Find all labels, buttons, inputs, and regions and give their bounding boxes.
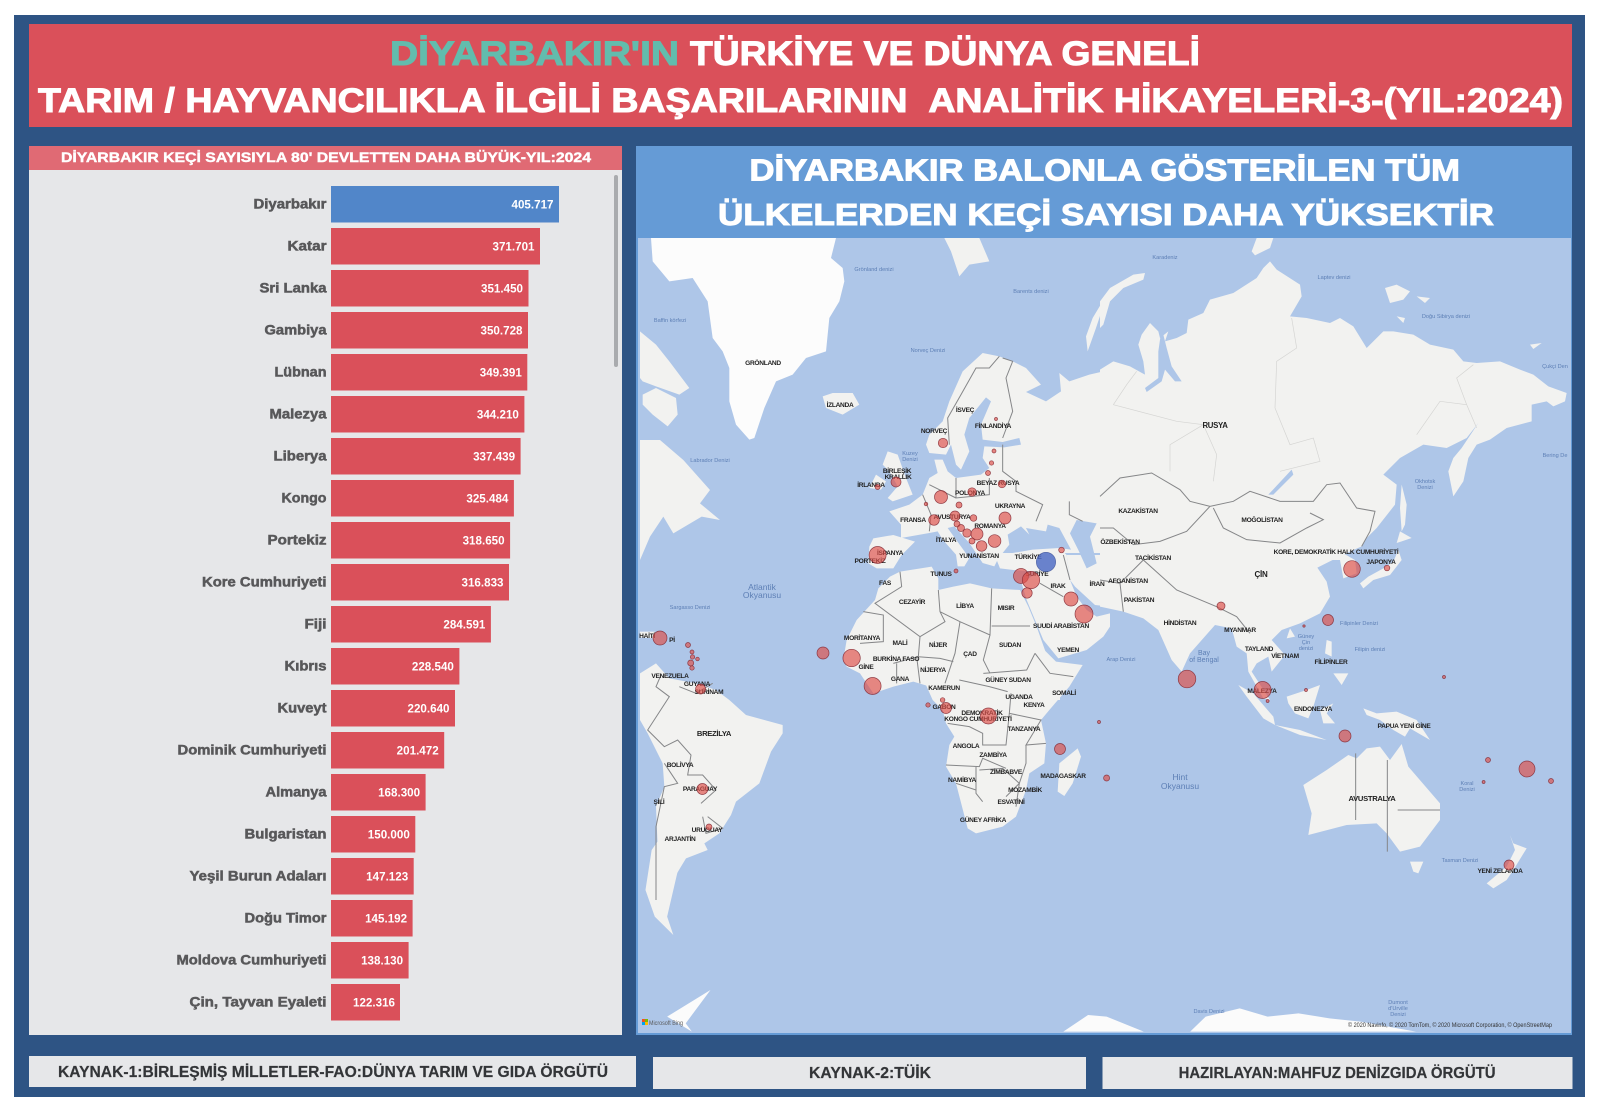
land: South America, southern Africa xyxy=(640,640,1083,900)
map sea labels: Bering De xyxy=(1543,453,1567,459)
map sea labels: Filipinler Denizi xyxy=(1340,621,1378,627)
bar: Moldova Cumhuriyeti xyxy=(176,942,409,978)
land: Siberia xyxy=(1100,238,1567,568)
map sea labels: Denizi xyxy=(1417,485,1433,491)
map country labels: AFGANİSTAN xyxy=(1108,577,1148,585)
map country labels: URUGUAY xyxy=(692,827,723,834)
map sea labels: Bay xyxy=(1198,650,1211,657)
map sea labels: Okhotsk xyxy=(1415,479,1435,485)
land: Atlantic Canada, Iberia, North Africa, Middle East xyxy=(640,440,1110,700)
map bubble: Diyarbakır xyxy=(1036,552,1056,572)
bar: Katar: 371.701 xyxy=(492,242,535,254)
land: Patagonia and Antarctica xyxy=(645,837,1416,1032)
bar: Almanya: 168.300 xyxy=(378,788,420,800)
map sea labels: Filipin denizi xyxy=(1355,647,1385,653)
bar: Kore Cumhuriyeti: Kore Cumhuriyeti xyxy=(202,574,326,590)
map country labels: MALEZYA xyxy=(1247,688,1277,695)
map country labels: GÜNEY AFRİKA xyxy=(960,815,1007,824)
bar: Çin, Tayvan Eyaleti xyxy=(190,984,400,1020)
author box xyxy=(1102,1057,1572,1089)
bar: Kıbrıs: 228.540 xyxy=(412,662,454,674)
map country labels: AVUSTURYA xyxy=(934,514,971,521)
bar: Sri Lanka: Sri Lanka xyxy=(260,280,327,296)
map sea labels: Arap Denizi xyxy=(1107,657,1135,663)
map country labels: FRANSA xyxy=(900,517,926,524)
bar: Kongo: Kongo xyxy=(282,490,326,506)
map country labels: UKRAYNA xyxy=(995,503,1026,510)
map country labels: KRALLIK xyxy=(885,474,912,481)
map country labels: KORE, DEMOKRATİK HALK CUMHURİYETİ xyxy=(1274,548,1399,556)
map country labels: DEMOKRATİK xyxy=(961,709,1003,717)
bar: Yeşil Burun Adaları xyxy=(190,858,414,894)
map sea labels: Davis Denizi xyxy=(1193,1009,1225,1015)
map country labels: NAMİBYA xyxy=(948,776,977,784)
bar: Kore Cumhuriyeti xyxy=(202,564,509,600)
bar: Fiji xyxy=(304,606,491,642)
map country labels: ÖZBEKİSTAN xyxy=(1100,537,1140,546)
map sea labels: Denizi xyxy=(1459,787,1475,793)
map country labels: CEZAYİR xyxy=(899,598,926,606)
bar: Kıbrıs: Kıbrıs xyxy=(284,658,326,674)
bar: Almanya xyxy=(266,774,426,810)
map country labels: TAYLAND xyxy=(1245,646,1274,653)
map land masses xyxy=(640,238,1567,1032)
bar: Doğu Timor: Doğu Timor xyxy=(244,910,327,926)
bar: Almanya: Almanya xyxy=(266,784,327,800)
title banner xyxy=(29,24,1572,127)
map heading xyxy=(718,152,1494,232)
map country labels: YEMEN xyxy=(1057,647,1080,654)
map country labels: PAPUA YENİ GİNE xyxy=(1378,722,1431,730)
map logo xyxy=(642,1019,683,1027)
map country labels: İSVEÇ xyxy=(956,406,975,414)
scrollbar xyxy=(614,175,618,367)
map sea labels: Laptev denizi xyxy=(1318,275,1350,281)
title banner: DİYARBAKIR'IN xyxy=(390,35,679,73)
bar: Lübnan xyxy=(274,354,527,390)
map country labels: GRÖNLAND xyxy=(745,358,781,367)
map sea labels: Denizi xyxy=(1390,1012,1406,1018)
map country labels: RUSYA xyxy=(1202,421,1228,430)
bar: Portekiz xyxy=(268,522,510,558)
bar: Moldova Cumhuriyeti: Moldova Cumhuriyeti xyxy=(176,952,326,968)
map country labels: SURİYE xyxy=(1026,570,1049,578)
map country labels: ESVATİNİ xyxy=(997,798,1025,806)
bar chart heading xyxy=(29,146,622,170)
map sea labels: Doğu Sibirya denizi xyxy=(1422,314,1470,320)
map ocean xyxy=(638,238,1571,1033)
map sea labels: Dumont xyxy=(1388,1000,1408,1006)
bar: Dominik Cumhuriyeti: Dominik Cumhuriyeti xyxy=(178,742,326,758)
bar: Lübnan: Lübnan xyxy=(274,364,326,380)
map country labels: KENYA xyxy=(1024,702,1045,709)
bar: Dominik Cumhuriyeti xyxy=(178,732,444,768)
bar: Yeşil Burun Adaları: 147.123 xyxy=(366,872,408,884)
map country labels: GABON xyxy=(932,704,956,711)
bar: Diyarbakır xyxy=(254,186,559,222)
map country labels: ROMANYA xyxy=(974,523,1006,530)
bar: Moldova Cumhuriyeti: 138.130 xyxy=(361,956,403,968)
bar: Kuveyt: 220.640 xyxy=(408,704,450,716)
map sea labels: Baffin körfezi xyxy=(654,318,686,324)
bar: Lübnan: 349.391 xyxy=(480,368,522,380)
bar: Katar: Katar xyxy=(288,238,327,254)
map bubbles: countries xyxy=(653,418,1554,870)
map country labels: KAZAKİSTAN xyxy=(1118,507,1158,515)
map country labels: PARAGUAY xyxy=(683,786,718,793)
map sea labels: Güney xyxy=(1298,634,1314,640)
map country labels: BOLİVYA xyxy=(667,761,694,769)
inland seas xyxy=(1003,328,1293,568)
source box 1 xyxy=(29,1056,636,1087)
map country labels: MALİ xyxy=(893,639,908,647)
map sea labels: Labrador Denizi xyxy=(690,458,730,464)
map country labels: İRAN xyxy=(1090,580,1105,588)
map country labels: ZİMBABVE xyxy=(990,768,1023,776)
map sea labels: Çin xyxy=(1302,640,1310,646)
map country labels: MOĞOLİSTAN xyxy=(1241,515,1283,524)
map heading: ÜLKELERDEN KEÇİ SAYISI DAHA YÜKSEKTİR xyxy=(718,197,1494,232)
map country labels: PAKİSTAN xyxy=(1124,596,1155,604)
map country labels: HİNDİSTAN xyxy=(1164,619,1197,627)
bar: Gambiya xyxy=(264,312,528,348)
source box 2 xyxy=(653,1057,1086,1089)
map country labels: POLONYA xyxy=(955,490,985,497)
map sea labels: Karadeniz xyxy=(1152,255,1178,261)
map country labels: ŞİLİ xyxy=(654,798,665,806)
map country labels: BREZİLYA xyxy=(697,729,732,738)
source box 2: KAYNAK-2:TÜİK xyxy=(809,1065,932,1082)
bar: Doğu Timor: 145.192 xyxy=(365,914,407,926)
bar: Portekiz: 318.650 xyxy=(463,536,505,548)
bar: Liberya xyxy=(274,438,521,474)
map country labels: FİLİPİNLER xyxy=(1315,658,1348,666)
map country labels: KAMERUN xyxy=(928,685,960,692)
map country labels: ZAMBİYA xyxy=(979,751,1007,759)
bar: Yeşil Burun Adaları: Yeşil Burun Adaları xyxy=(190,868,326,884)
map country labels: PORTEKİZ xyxy=(855,557,886,565)
map country labels: ARJANTİN xyxy=(665,835,696,843)
bar: Kuveyt xyxy=(278,690,455,726)
map country labels: IRAK xyxy=(1051,583,1066,590)
author box: HAZIRLAYAN:MAHFUZ DENİZGIDA ÖRGÜTÜ xyxy=(1179,1065,1496,1082)
map sea labels: of Bengal xyxy=(1189,657,1219,664)
map country labels: BEYAZ RUSYA xyxy=(977,480,1020,487)
map sea labels: Barents denizi xyxy=(1013,289,1049,295)
bar: Gambiya: Gambiya xyxy=(264,322,327,338)
bar: Dominik Cumhuriyeti: 201.472 xyxy=(397,746,439,758)
map country labels: FAS xyxy=(879,580,892,587)
map country labels: BURKİNA FASO xyxy=(873,655,919,663)
map sea labels xyxy=(654,255,1568,1018)
map country labels: TANZANYA xyxy=(1008,726,1041,733)
map logo: Microsoft Bing xyxy=(649,1020,683,1027)
title banner: TARIM / HAYVANCILIKLA İLGİLİ BAŞARILARININ ANALİTİK HİKAYELERİ-3-(YIL:2024) xyxy=(38,82,1563,120)
map country labels: MADAGASKAR xyxy=(1040,773,1086,780)
map country labels: AVUSTRALYA xyxy=(1349,794,1396,803)
map country labels: MISIR xyxy=(998,605,1015,612)
title banner: TÜRKİYE VE DÜNYA GENELİ xyxy=(690,34,1200,73)
bar: Bulgaristan xyxy=(244,816,415,852)
bar: Diyarbakır: 405.717 xyxy=(512,200,554,212)
map country labels: MORİTANYA xyxy=(844,634,881,642)
bar: Çin, Tayvan Eyaleti: Çin, Tayvan Eyaleti xyxy=(190,994,326,1010)
bar: Liberya: 337.439 xyxy=(473,452,515,464)
map country labels: UGANDA xyxy=(1005,694,1033,701)
map country labels: TUNUS xyxy=(930,571,953,578)
map heading: DİYARBAKIR BALONLA GÖSTERİLEN TÜM xyxy=(750,152,1460,188)
bar: Katar xyxy=(288,228,540,264)
map sea labels: Sargasso Denizi xyxy=(670,605,710,611)
map country labels: HAİTİ xyxy=(639,632,655,640)
map country labels: NORVEÇ xyxy=(921,428,948,435)
map country labels: MOZAMBİK xyxy=(1008,786,1042,794)
land: Greenland, Canada, northern Europe xyxy=(640,238,1111,566)
map country labels: İRLANDA xyxy=(857,481,885,489)
map sea labels: Denizi xyxy=(902,457,918,463)
map country labels: BİRLEŞİK xyxy=(883,467,912,475)
bar: Bulgaristan: Bulgaristan xyxy=(244,826,326,842)
map country labels: VENEZUELA xyxy=(651,673,689,680)
map country labels: İTALYA xyxy=(936,536,957,544)
map country labels: SOMALİ xyxy=(1052,689,1076,697)
bar: Kongo xyxy=(282,480,514,516)
bar: Malezya: Malezya xyxy=(270,406,327,422)
map country labels: SUUDİ ARABİSTAN xyxy=(1033,622,1090,630)
bar: Diyarbakır: Diyarbakır xyxy=(254,196,327,212)
map country labels: ANGOLA xyxy=(953,743,980,750)
map country labels: NİJERYA xyxy=(920,666,946,674)
map sea labels: Hint xyxy=(1172,772,1188,782)
map country labels: VİETNAM xyxy=(1271,652,1300,660)
map sea labels: Okyanusu xyxy=(1161,781,1199,791)
panel: bar chart of goat counts xyxy=(29,146,622,1035)
map sea labels: Kuzey xyxy=(902,451,918,457)
bar: Kore Cumhuriyeti: 316.833 xyxy=(462,578,504,590)
map sea labels: d'Urville xyxy=(1388,1006,1408,1012)
map country labels: GUYANA xyxy=(684,681,711,688)
map country labels: İSPANYA xyxy=(877,549,904,557)
map country labels: GÜNEY SUDAN xyxy=(985,675,1031,684)
source box 1: KAYNAK-1:BİRLEŞMİŞ MİLLETLER-FAO:DÜNYA TARIM VE GIDA ÖRGÜTÜ xyxy=(58,1064,608,1081)
map sea labels: Grönland denizi xyxy=(854,267,894,273)
map country labels: GİNE xyxy=(859,663,874,671)
bar: Malezya: 344.210 xyxy=(477,410,519,422)
map sea labels: Atlantik xyxy=(748,582,777,592)
map country labels: YUNANİSTAN xyxy=(959,552,999,560)
map sea labels: Norveç Denizi xyxy=(911,348,945,354)
map country labels: GANA xyxy=(891,676,910,683)
bar: Kongo: 325.484 xyxy=(466,494,509,506)
map country labels: FİNLANDİYA xyxy=(975,422,1012,430)
bar: Doğu Timor xyxy=(244,900,413,936)
bar: Malezya xyxy=(270,396,524,432)
bar: Bulgaristan: 150.000 xyxy=(368,830,410,842)
bar chart heading: DİYARBAKIR KEÇİ SAYISIYLA 80' DEVLETTEN DAHA BÜYÜK-YIL:2024 xyxy=(61,149,591,165)
map attribution: © 2020 Navinfo, © 2020 TomTom, © 2020 Microsoft Corporation, © OpenStreetMap xyxy=(1348,1022,1553,1029)
country borders xyxy=(648,356,1440,900)
faint regional borders xyxy=(1113,318,1477,481)
bar: Portekiz: Portekiz xyxy=(268,532,327,548)
land: South Asia, Southeast Asia, Oceania xyxy=(1100,540,1527,888)
panel: world map xyxy=(636,146,1572,1035)
bar: Fiji: Fiji xyxy=(304,616,326,632)
bar: Kuveyt: Kuveyt xyxy=(278,700,327,716)
map country labels: JAPONYA xyxy=(1366,559,1396,566)
map country labels: LİBYA xyxy=(956,602,974,610)
map country labels: ÇAD xyxy=(963,651,977,658)
map country labels: TÜRKİYE xyxy=(1015,552,1042,561)
map country labels xyxy=(639,358,1523,875)
map country labels: Pİ xyxy=(669,636,675,644)
bar: Fiji: 284.591 xyxy=(443,620,486,632)
map country labels: ENDONEZYA xyxy=(1294,706,1333,713)
map sea labels: Koral xyxy=(1460,781,1474,787)
map country labels: ÇİN xyxy=(1255,570,1268,579)
bar: Çin, Tayvan Eyaleti: 122.316 xyxy=(353,998,395,1010)
map sea labels: Okyanusu xyxy=(743,590,781,600)
map country labels: SUDAN xyxy=(999,642,1022,649)
bar: Liberya: Liberya xyxy=(274,448,327,464)
map country labels: TACİKİSTAN xyxy=(1135,554,1172,562)
map country labels: MYANMAR xyxy=(1224,627,1256,634)
map sea labels: Çukçi Den xyxy=(1542,364,1568,370)
bar: Sri Lanka: 351.450 xyxy=(481,284,523,296)
bar: Sri Lanka xyxy=(260,270,528,306)
map sea labels: Tasman Denizi xyxy=(1442,858,1478,864)
map country labels: İZLANDA xyxy=(827,401,854,409)
map sea labels: denizi xyxy=(1299,646,1313,652)
map country labels: NİJER xyxy=(929,641,947,649)
bar: Gambiya: 350.728 xyxy=(480,326,523,338)
map country labels: KONGO CUMHURİYETİ xyxy=(944,715,1012,723)
map country labels: SURİNAM xyxy=(695,688,724,696)
bar: Kıbrıs xyxy=(284,648,459,684)
map country labels: YENİ ZELANDA xyxy=(1477,867,1523,875)
